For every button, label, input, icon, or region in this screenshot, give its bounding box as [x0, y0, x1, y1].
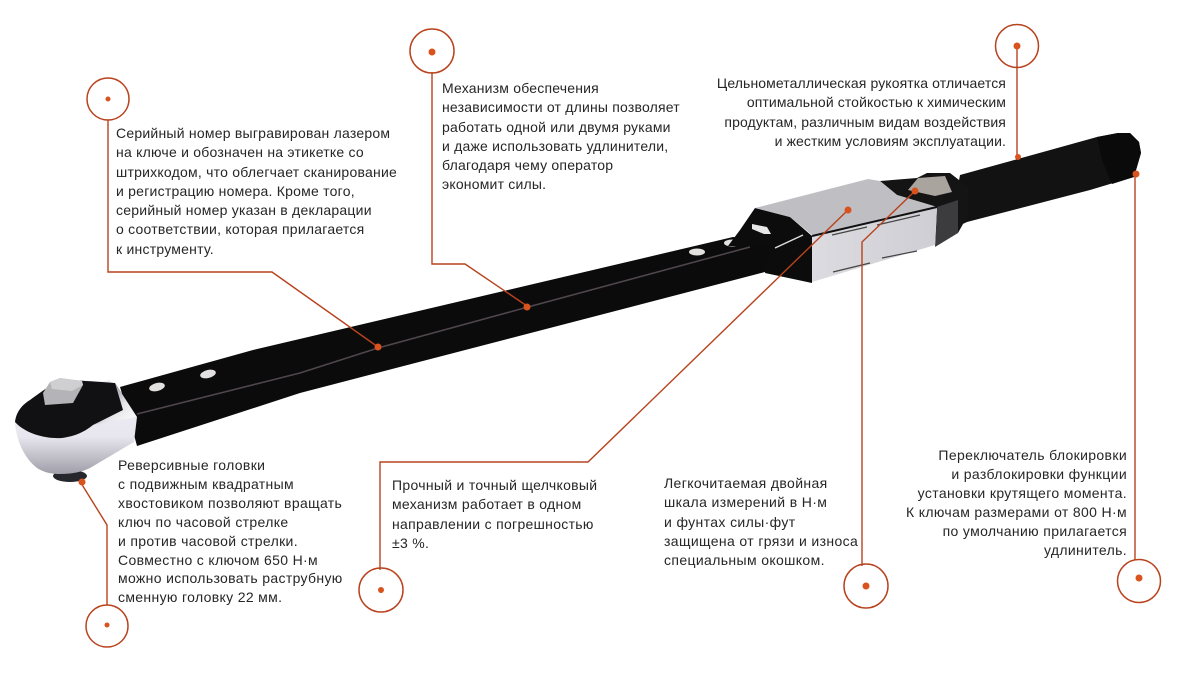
text: lock switch: Переключатель блокировки [938, 447, 1127, 463]
text: reversible heads: можно использовать раструбную [118, 570, 343, 586]
text: metal handle: продуктам, различным видам воздействия [724, 114, 1006, 130]
wrench shaft [120, 237, 790, 446]
text: reversible heads: ключ по часовой стрелке [118, 514, 288, 530]
collar between body and grip [880, 173, 968, 233]
body rear block [935, 200, 958, 247]
text: serial number [116, 125, 397, 257]
text: click mechanism: механизм работает в одном [392, 496, 582, 512]
head top [15, 380, 137, 438]
text: metal handle [717, 75, 1006, 149]
text: lock switch: К ключам размерами от 800 Н·м [906, 504, 1127, 520]
text: click mechanism [392, 477, 597, 551]
text: length independence: и даже использовать удлинители, [442, 138, 668, 154]
text: click mechanism: ±3 %. [392, 535, 429, 551]
text: dual scale [664, 475, 858, 568]
text: lock switch: и разблокировки функции [951, 466, 1127, 482]
text: dual scale: защищена от грязи и износа [664, 533, 858, 549]
text: length independence: экономит силы. [442, 176, 546, 192]
callout dots [78, 42, 1142, 628]
text: length independence: Механизм обеспечения [442, 80, 599, 96]
wrench [15, 133, 1141, 482]
text: serial number: на ключе и обозначен на этикетке со [116, 144, 364, 160]
text: reversible heads: Реверсивные головки [118, 457, 265, 473]
text: reversible heads: и против часовой стрелки. [118, 533, 298, 549]
window slits [832, 215, 920, 272]
window glass [908, 176, 952, 196]
chrome highlight [93, 383, 137, 425]
text: serial number: к инструменту. [116, 240, 214, 256]
side plate with window [812, 207, 937, 282]
text: metal handle: и жестким условиям эксплуатации. [775, 133, 1006, 149]
text: length independence [442, 80, 680, 192]
ratchet head [15, 378, 137, 482]
chamfer highlight [775, 235, 803, 248]
text: lock switch: по умолчанию прилагается [943, 523, 1127, 539]
text: reversible heads: хвостовиком позволяют вращать [118, 495, 342, 511]
text: click mechanism: Прочный и точный щелчковый [392, 477, 597, 493]
text: serial number: Серийный номер выгравирован лазером [116, 125, 390, 141]
text: click mechanism: направлении с погрешностью [392, 516, 594, 532]
handle grip [950, 133, 1141, 230]
text: dual scale: и фунтах силы·фут [664, 514, 796, 530]
text: reversible heads: с подвижным квадратным [118, 476, 294, 492]
text: lock switch: установки крутящего момента. [918, 485, 1127, 501]
text: reversible heads: Совместно с ключом 650 Н·м [118, 552, 318, 568]
text: lock switch [906, 447, 1127, 558]
top plate [755, 179, 937, 235]
text: lock switch: удлинитель. [1044, 542, 1127, 558]
text: reversible heads [118, 457, 343, 605]
text: metal handle: Цельнометаллическая рукоятка отличается [717, 75, 1006, 91]
head silver band [15, 380, 137, 474]
handle end cap [1097, 133, 1141, 184]
text: dual scale: специальным окошком. [664, 552, 825, 568]
text: dual scale: шкала измерений в Н·м [664, 494, 827, 510]
text: length independence: работать одной или двумя руками [442, 118, 671, 134]
text: serial number: и регистрацию номера. Кроме того, [116, 183, 355, 199]
lower drive [53, 470, 87, 482]
text: dual scale: Легкочитаемая двойная [664, 475, 828, 491]
text: serial number: серийный номер указан в декларации [116, 202, 372, 218]
text: metal handle: оптимальной стойкостью к химическим [747, 94, 1006, 110]
body front block [728, 208, 812, 283]
text: length independence: независимости от длины позволяет [442, 99, 680, 115]
square drive bolt [43, 378, 83, 405]
text: serial number: штрихкодом, что облегчает сканирование [116, 164, 397, 180]
arrow mark [752, 224, 771, 234]
shaft groove [137, 247, 750, 414]
text: reversible heads: сменную головку 22 мм. [118, 589, 282, 605]
shaft slots [148, 240, 740, 393]
text: length independence: благодаря чему оператор [442, 157, 613, 173]
text: serial number: о соответствии, которая прилагается [116, 221, 364, 237]
callout lines [81, 46, 1135, 605]
